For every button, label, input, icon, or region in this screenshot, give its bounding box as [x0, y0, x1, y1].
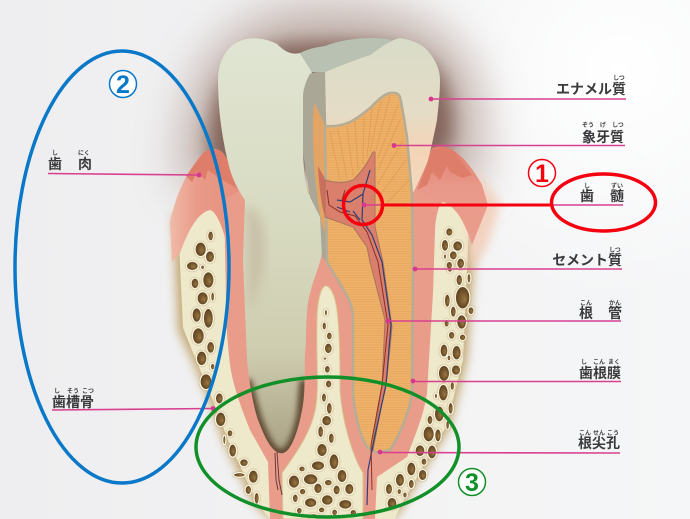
label: 象牙質: 象牙質	[582, 129, 624, 145]
interdental bone septum	[282, 286, 363, 519]
bone cavities: lower	[191, 261, 474, 518]
label: 歯髄	[362, 182, 624, 207]
label: 象牙質: しつ	[612, 122, 624, 129]
periodontal ligament	[224, 190, 436, 519]
bone cavities: upper left	[186, 231, 215, 271]
label: 歯根膜: こん	[593, 359, 605, 366]
label: 歯根膜: 歯根膜	[579, 365, 621, 381]
label: 象牙質: ぞう	[582, 121, 594, 129]
label: 根尖孔: こん	[579, 430, 591, 437]
number 3: 3	[465, 469, 479, 497]
left half of tooth	[218, 38, 322, 453]
pulp and root canal	[275, 152, 392, 505]
label: 歯肉	[48, 150, 201, 177]
label: エナメル質: エナメル質	[556, 81, 626, 97]
label: 根尖孔: 根尖孔	[578, 435, 620, 451]
crown shadow halo	[179, 4, 485, 195]
bone cavities: upper right	[441, 228, 465, 269]
label: 根尖孔: こう	[607, 429, 619, 437]
label: エナメル質: しつ	[613, 75, 625, 82]
label: 象牙質	[392, 121, 625, 148]
label: 歯根膜: し	[581, 359, 587, 366]
label: 根管	[386, 300, 622, 323]
label: セメント質	[413, 247, 622, 271]
label: 歯槽骨: し	[54, 388, 60, 395]
label: 歯肉: 歯	[48, 156, 62, 172]
red ellipse: group 1	[552, 174, 656, 231]
label: 歯槽骨: 歯槽骨	[52, 394, 94, 410]
number 3	[458, 468, 486, 497]
label: 根管: 根	[579, 305, 593, 321]
alveolar bone	[173, 190, 476, 519]
red highlight: pulp connector	[344, 186, 550, 224]
number 1	[528, 160, 556, 188]
label: 歯肉: し	[52, 150, 58, 157]
label: 根尖孔	[378, 429, 620, 454]
label: 歯槽骨: そう	[67, 387, 79, 395]
label: エナメル質	[429, 75, 626, 101]
blue ellipse: group 2	[15, 51, 229, 483]
label: 歯髄: ずい	[611, 182, 623, 190]
label: 歯髄: し	[584, 183, 590, 190]
label: 歯槽骨: こつ	[82, 388, 94, 395]
label: 象牙質: げ	[600, 121, 606, 129]
label: 根管: 管	[608, 305, 622, 321]
label: 根尖孔: せん	[593, 430, 605, 437]
label: 歯肉: にく	[78, 150, 90, 157]
label: 歯根膜: まく	[608, 359, 620, 366]
label: 歯根膜	[411, 359, 621, 383]
label: セメント質: セメント質	[552, 252, 622, 268]
label: 歯槽骨	[52, 387, 215, 411]
number 1: 1	[535, 160, 549, 188]
green ellipse: group 3	[196, 377, 459, 517]
label: 根管: こん	[580, 300, 592, 307]
label: 歯肉: 肉	[78, 156, 92, 172]
number 2: 2	[116, 71, 130, 99]
label: セメント質: しつ	[609, 247, 621, 254]
gum: left	[170, 149, 246, 262]
gum: right	[412, 147, 500, 272]
occlusal surface behind section	[300, 38, 392, 72]
enamel and grey cut face	[303, 38, 440, 262]
label: 歯髄: 歯	[580, 188, 594, 204]
dentin	[325, 93, 413, 453]
label: 根管: かん	[609, 300, 621, 307]
label: 歯髄: 髄	[610, 188, 624, 204]
number 2	[110, 70, 136, 99]
